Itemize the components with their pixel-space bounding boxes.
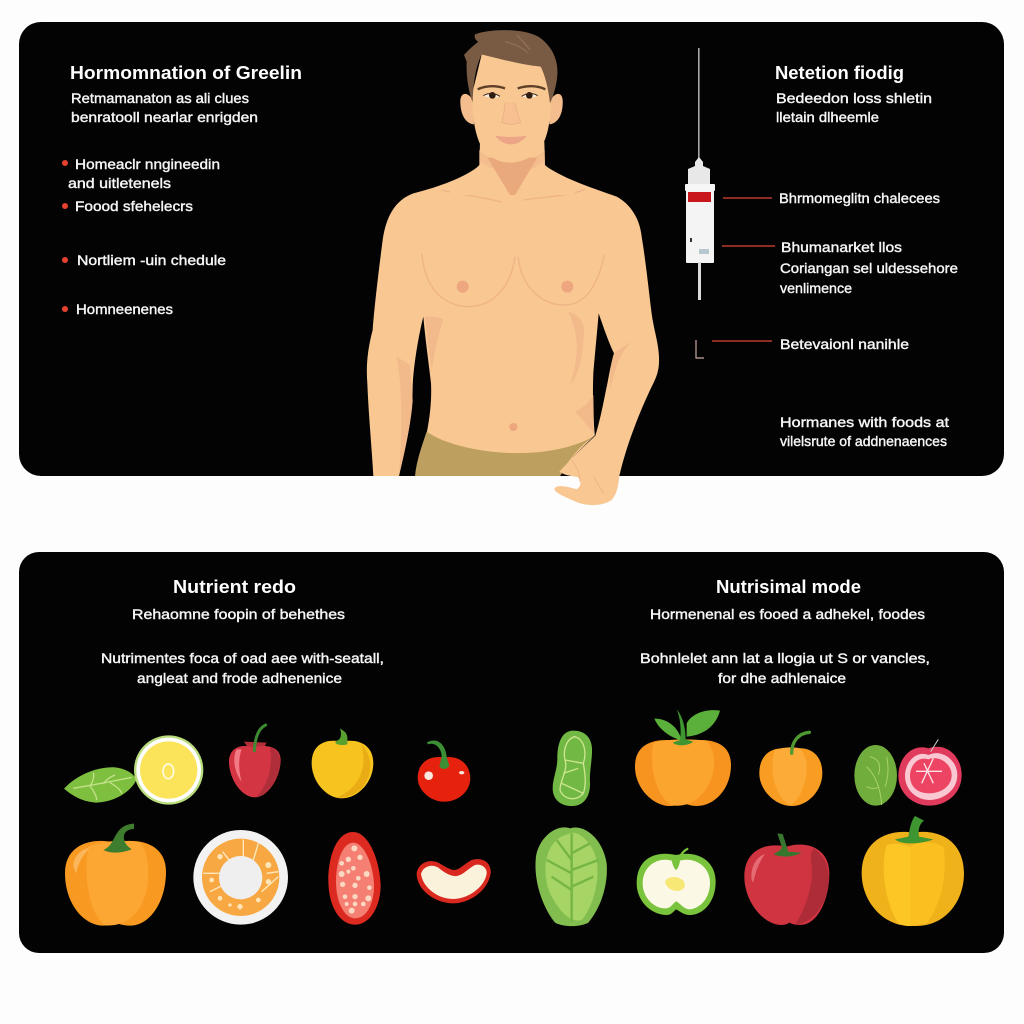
nipples and navel [457, 281, 573, 431]
icon: red pepper small [229, 725, 281, 797]
icon: lemon slice [134, 735, 203, 805]
panel: top hormone panel [19, 22, 1004, 476]
icon: green oval [854, 745, 897, 806]
text block: nutrient left: angleat and frode adhenenice [137, 670, 342, 686]
chest shading [422, 189, 604, 307]
neck shadow [479, 150, 545, 168]
subheading: right top [776, 90, 932, 125]
icon: apple half [637, 849, 716, 915]
gaps between arms and torso [399, 313, 614, 476]
callout labels: Bhumanarket llos [781, 239, 902, 255]
food icons: left group [64, 725, 491, 926]
eyes [483, 92, 538, 99]
food icons: right group [535, 709, 964, 926]
callout labels [779, 190, 958, 449]
icon: syringe [685, 48, 715, 300]
icon: orange with leaves [635, 709, 731, 806]
bullet list: Foood sfehelecrs [75, 198, 193, 214]
icon: leaf [64, 767, 137, 803]
icon: green pod [553, 731, 592, 806]
nose [502, 102, 521, 124]
heading: right top: Netetion fiodig [775, 63, 904, 83]
bullet list: Homeaclr nngineedin [75, 156, 220, 172]
neck [450, 142, 575, 195]
icon: cut red pepper with seeds [328, 832, 381, 925]
icon: tomato small [418, 740, 470, 802]
hand [554, 435, 619, 505]
panel: bottom nutrient panel [19, 552, 1004, 953]
text block: nutrient left [101, 577, 384, 686]
text block: nutrient left: Nutrimentes foca of oad aee with-seatall, [101, 650, 384, 666]
callout labels: Betevaionl nanihle [780, 336, 909, 352]
heading: nutrient left: Nutrient redo [173, 577, 296, 597]
text block: nutrient right [640, 577, 930, 686]
icon: yellow pepper small [312, 728, 373, 798]
subheading: left top: Retmamanaton as ali clues [71, 90, 249, 106]
bullet list [62, 156, 226, 317]
text block: nutrient left: Rehaomne foopin of behethes [132, 606, 345, 622]
illustration: man torso [367, 30, 659, 505]
subheading: left top [71, 90, 258, 125]
torso and arm shading [397, 312, 632, 476]
callout labels: Bhrmomeglitn chalecees [779, 190, 940, 206]
callout labels: vilelsrute of addnenaences [780, 433, 947, 449]
hand creases [572, 460, 603, 493]
subheading: right top: lletain dlheemle [776, 109, 879, 125]
icon: lettuce [535, 827, 607, 926]
callout labels: Hormanes with foods at [780, 414, 949, 430]
icon: small orange [759, 732, 822, 806]
text block: nutrient right: Hormenenal es fooed a adhekel, foodes [650, 606, 925, 622]
icon: cut chili [417, 859, 491, 903]
body [367, 167, 659, 505]
bullet list: Nortliem -uin chedule [77, 252, 226, 268]
mouth [495, 136, 527, 144]
heading: nutrient right: Nutrisimal mode [716, 577, 861, 597]
icon: big yellow pepper [862, 816, 964, 926]
hair [464, 30, 557, 103]
bullet list: Homneenenes [76, 301, 173, 317]
icon: red apple [744, 833, 829, 925]
callout: right column text with connectors [696, 63, 958, 449]
callout connectors [696, 198, 775, 358]
heading: left top: Hormomnation of Greelin [70, 63, 302, 83]
subheading: right top: Bedeedon loss shletin [776, 90, 932, 106]
icon: orange slice on plate [193, 830, 288, 925]
ears [460, 94, 563, 124]
icon: cut pomegranate [898, 739, 962, 806]
neck v shadow [487, 158, 537, 195]
icon: orange pumpkin [65, 824, 166, 926]
subheading: left top: benratooll nearlar enrigden [71, 109, 258, 125]
left text block: hormone information [62, 63, 302, 317]
pants [415, 432, 596, 476]
head [450, 30, 575, 195]
text block: nutrient right: Bohnlelet ann lat a llogia ut S or vancles, [640, 650, 930, 666]
callout labels: Coriangan sel uldessehore [780, 260, 958, 276]
callout labels: venlimence [780, 280, 852, 296]
skin silhouette [367, 167, 659, 476]
face [472, 54, 551, 163]
bullet list: and uitletenels [68, 175, 171, 191]
text block: nutrient right: for dhe adhlenaice [718, 670, 846, 686]
eyebrows [478, 86, 545, 89]
